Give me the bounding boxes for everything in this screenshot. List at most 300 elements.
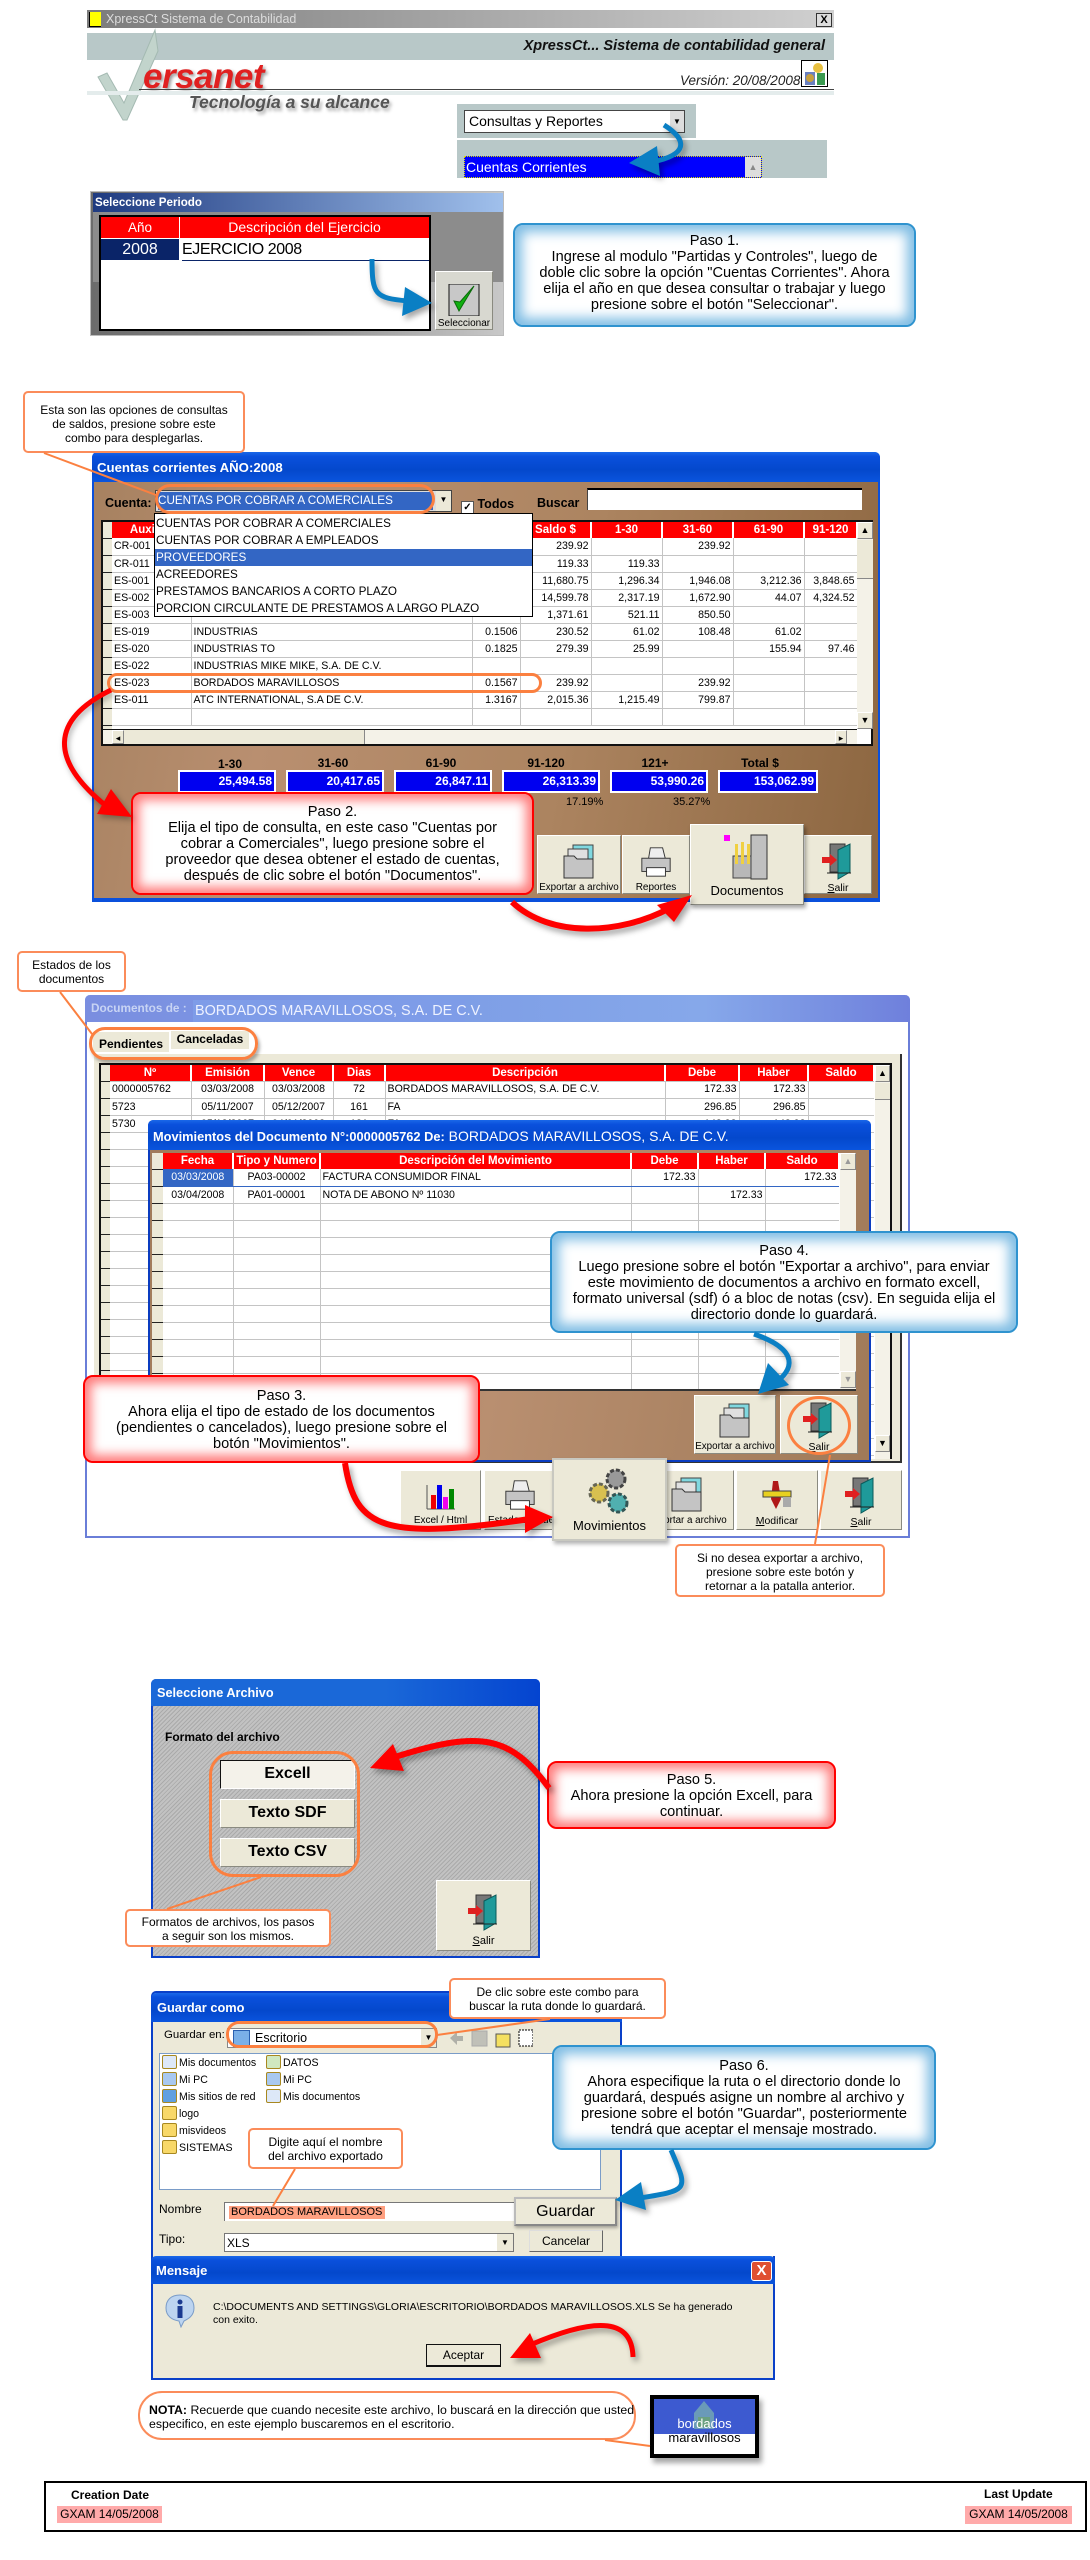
title bar: Seleccione Archivo: [157, 1686, 274, 1700]
Nombre field: Nombre: [159, 2202, 202, 2216]
callout: combo route hint: [449, 1978, 666, 2019]
connector: formats callout: [167, 1877, 261, 1909]
accounts grid: 119.33: [557, 558, 588, 570]
callout: combo hint: combo para desplegarlas.: [65, 431, 203, 445]
bottom toolbar buttons: Salir: [850, 1516, 872, 1528]
dropdown list of account types: PORCION CIRCULANTE DE PRESTAMOS A LARGO PLAZO: [156, 602, 479, 615]
accounts grid: 239.92: [556, 676, 588, 688]
panel: Cuentas corrientes window: 17.19%: [566, 796, 603, 808]
callout: Paso 2: cobrar a Comerciales", luego presione sobre el: [181, 836, 484, 852]
title bar: Cuentas corrientes AÑO:2008: [97, 460, 283, 475]
arrow: combo to list: [629, 125, 681, 176]
accounts grid: ES-002: [114, 592, 149, 604]
documents grid: 5723: [112, 1100, 136, 1112]
accounts grid: 0.1825: [485, 642, 518, 654]
toolbar icons: [450, 2030, 533, 2048]
panel: Cuentas corrientes window: 153,062.99: [754, 774, 814, 788]
dropdown list of account types: PROVEEDORES: [156, 551, 246, 564]
panel: Cuentas corrientes window: Salir: [827, 882, 849, 894]
note callout: [138, 2391, 636, 2440]
title bar: Movimientos del Documento N°:0000005762 De: BORDADOS MARAVILLOSOS, S.A. DE C.V.: [153, 1128, 729, 1144]
documents grid: 72: [353, 1083, 365, 1095]
accounts grid: 14,599.78: [541, 592, 588, 604]
title bar: [148, 1120, 871, 1150]
icon: bordados maravillosos file: maravillosos: [668, 2430, 741, 2445]
panel: Documentos window: [85, 995, 910, 1538]
callout: Paso 4: Luego presione sobre el botón "Exportar a archivo", para enviar: [578, 1259, 990, 1275]
documents grid: 03/03/2008: [272, 1083, 325, 1095]
panel: Guardar como window: XLS: [227, 2236, 250, 2250]
button: Aceptar: Aceptar: [443, 2348, 484, 2362]
title bar: [151, 1993, 622, 2022]
vertical scrollbar: [857, 522, 873, 729]
accounts grid: Auxiliar: [130, 524, 172, 536]
bottom toolbar buttons: Exportar a archivo: [647, 1515, 727, 1526]
title: [93, 193, 503, 212]
movements grid: Tipo y Numero: [236, 1155, 317, 1167]
list panel: Cuentas Corrientes: [466, 159, 587, 175]
title bar: [151, 1679, 540, 1706]
accounts grid: INDUSTRIAS: [194, 626, 258, 638]
callout: Salir hint: retornar a la patalla anterior.: [705, 1579, 855, 1593]
panel: Movimientos window: [148, 1120, 871, 1462]
button: Salir: [780, 1395, 858, 1454]
panel: Cuentas corrientes window: 91-120: [527, 756, 565, 770]
documents grid: Vence: [282, 1067, 315, 1079]
buttons row: [537, 824, 872, 910]
icon: information: [166, 2294, 194, 2328]
highlight ring: tabs: [89, 1027, 258, 1060]
scrollbar: ▲: [844, 1156, 852, 1166]
documents grid: 05/12/2007: [201, 1118, 254, 1130]
Guardar en label: Guardar en:: [164, 2029, 225, 2041]
file list: Mis sitios de red: [179, 2091, 256, 2103]
tabs: Canceladas: [177, 1032, 243, 1046]
icon: bordados maravillosos file: [650, 2395, 759, 2458]
documents grid: Dias: [347, 1067, 371, 1079]
scrollbar: [840, 1153, 856, 1391]
callout: formats hint: Formatos de archivos, los pasos: [142, 1915, 314, 1929]
accounts grid: ES-020: [114, 642, 149, 654]
title bar: [92, 452, 880, 482]
documents grid: 5730: [112, 1118, 136, 1130]
button: Texto CSV: Texto CSV: [248, 1843, 327, 1860]
checkbox Todos: ✓: [463, 502, 472, 513]
accounts grid: 97.46: [828, 642, 854, 654]
accounts grid: [101, 520, 873, 746]
file list: SISTEMAS: [179, 2142, 233, 2154]
accounts grid: 61-90: [754, 524, 783, 536]
combo panel: Consultas y Reportes: [469, 113, 603, 129]
close button: [751, 2261, 772, 2281]
movements grid: Descripción del Movimiento: [399, 1155, 552, 1167]
movements grid: PA03-00002: [247, 1171, 306, 1183]
button: Salir: [436, 1880, 531, 1951]
accounts grid: CR-011: [114, 558, 150, 570]
panel: Cuentas corrientes window: 53,990.26: [651, 774, 704, 788]
file list: Mis documentos: [283, 2091, 360, 2103]
button: Exportar a archivo: Exportar a archivo: [695, 1441, 775, 1452]
callout: Paso 3: Ahora elija el tipo de estado de los documentos: [128, 1404, 435, 1420]
connector: combo callout: [44, 453, 156, 495]
highlight ring: folder combo: [226, 2021, 438, 2048]
highlight ring: account combo: [155, 484, 435, 514]
accounts grid: 1-30: [615, 524, 638, 536]
documents grid: FA: [388, 1118, 400, 1130]
combo panel: ▼: [673, 117, 681, 126]
title: Seleccione Periodo: [95, 196, 202, 209]
panel: Guardar como window: BORDADOS MARAVILLOSOS: [231, 2206, 382, 2218]
callout: Paso 2: Elija el tipo de consulta, en este caso "Cuentas por: [168, 820, 497, 836]
accounts grid: ATC INTERNATIONAL, S.A DE C.V.: [194, 694, 363, 706]
button: Movimientos: [552, 1458, 667, 1541]
documents grid: Haber: [757, 1067, 790, 1079]
accounts grid: INDUSTRIAS MIKE MIKE, S.A. DE C.V.: [194, 660, 381, 672]
footer box: [44, 2481, 1087, 2532]
movements grid: Haber: [715, 1155, 748, 1167]
creation date value: GXAM 14/05/2008: [60, 2507, 159, 2521]
movements grid: 03/03/2008: [171, 1171, 224, 1183]
dropdown list of account types: CUENTAS POR COBRAR A COMERCIALES: [156, 517, 391, 530]
arrow: Paso 6 to Guardar: [615, 2150, 682, 2210]
documents grid: 05/11/2007: [201, 1100, 254, 1112]
movements grid: 172.33: [730, 1188, 762, 1200]
button: Movimientos: Movimientos: [573, 1518, 646, 1533]
callout: Paso 5: continuar.: [660, 1804, 723, 1820]
callout: Paso 3: (pendientes o cancelados), luego presione sobre el: [116, 1420, 447, 1436]
accounts grid: 799.87: [698, 694, 730, 706]
callout: Paso 4: este movimiento de documentos a archivo en formato excell,: [588, 1275, 980, 1291]
title bar: Documentos de :: [91, 1001, 187, 1015]
button: Guardar: [514, 2197, 617, 2226]
list panel: ▲: [749, 162, 757, 172]
documents grid: 296.85: [704, 1100, 736, 1112]
folder combo: Escritorio: [255, 2031, 307, 2045]
button: Aceptar: [426, 2344, 501, 2367]
callout: Paso 2: Paso 2.: [308, 804, 357, 820]
title bar: [87, 10, 834, 28]
button: Salir: Salir: [808, 1441, 830, 1453]
callout: combo hint: [23, 391, 245, 453]
callout: Paso 6: [552, 2045, 936, 2150]
last update label: Last Update: [984, 2487, 1053, 2501]
callout: Paso 1: presione sobre el botón "Seleccionar".: [591, 297, 838, 313]
horizontal scrollbar: ◂: [116, 733, 120, 743]
file list: Mi PC: [179, 2074, 208, 2086]
accounts grid: 239.92: [556, 540, 588, 552]
callout: Paso 2: después de clic sobre el botón "Documentos".: [184, 868, 481, 884]
account combo: CUENTAS POR COBRAR A COMERCIALES: [158, 494, 393, 507]
button: Texto SDF: Texto SDF: [249, 1804, 326, 1821]
panel: Cuentas corrientes window: Documentos: [710, 883, 783, 898]
panel: Guardar como window: [151, 1991, 622, 2256]
banner strip: [87, 33, 834, 60]
scrollbar: ▲: [878, 1068, 887, 1078]
panel: Cuentas corrientes window: 121+: [641, 756, 669, 770]
highlight ring: format buttons: [209, 1751, 360, 1877]
tabs: [93, 1031, 249, 1052]
title bar: [85, 995, 910, 1022]
account combo: [155, 490, 452, 512]
callout: Paso 1: Paso 1.: [690, 233, 739, 249]
file list: logo: [179, 2108, 199, 2120]
panel: Cuentas corrientes window: Exportar a archivo: [539, 882, 619, 893]
bottom toolbar buttons: Excel / Html: [414, 1515, 467, 1526]
callout: Paso 6: Ahora especifique la ruta o el directorio donde lo: [587, 2074, 901, 2090]
bottom toolbar buttons: [401, 1458, 902, 1546]
totals labels and values: [178, 756, 818, 808]
icon: bordados maravillosos file: bordados: [677, 2416, 732, 2431]
last update value: GXAM 14/05/2008: [969, 2507, 1068, 2521]
accounts grid: 521.11: [628, 608, 660, 620]
callout: Paso 6: tendrá que aceptar el mensaje mostrado.: [611, 2122, 877, 2138]
callout: Paso 4: Paso 4.: [759, 1243, 809, 1259]
accounts grid: 0.1506: [485, 626, 518, 638]
callout: combo hint: Esta son las opciones de consultas: [40, 403, 228, 417]
accounts grid: 1,296.34: [618, 574, 660, 586]
panel: application window XpressCt: [87, 10, 834, 178]
connector: note callout: [605, 2440, 650, 2446]
title bar: Mensaje: [156, 2263, 207, 2278]
accounts grid: 1,672.90: [689, 592, 730, 604]
file list: DATOS: [283, 2057, 319, 2069]
accounts grid: 91-120: [813, 524, 848, 536]
documents grid: 05/12/2007: [272, 1100, 325, 1112]
callout: document states: Estados de los: [32, 958, 111, 972]
dropdown list of account types: [154, 513, 533, 617]
title bar: BORDADOS MARAVILLOSOS, S.A. DE C.V.: [195, 1003, 483, 1019]
message text: con exito.: [213, 2314, 258, 2326]
horizontal scrollbar: [103, 729, 857, 744]
panel: Cuentas corrientes window: 26,313.39: [543, 774, 596, 788]
arrow: Paso 2 to Documentos: [512, 895, 692, 929]
checkbox Todos: Todos: [477, 497, 514, 511]
callout: Paso 6: guardará, después asigne un nombre al archivo y: [584, 2090, 904, 2106]
panel: Cuentas corrientes window: 26,847.11: [435, 774, 488, 788]
logo check mark: [97, 28, 158, 120]
callout: file name hint: del archivo exportado: [268, 2149, 383, 2163]
documents grid: 131: [350, 1118, 368, 1130]
callout: combo hint: de saldos, presione sobre este: [52, 417, 216, 431]
Seleccionar button: Seleccionar: [438, 318, 490, 329]
horizontal scrollbar: ▸: [839, 733, 843, 743]
title bar: X: [820, 14, 828, 26]
button: Cancelar: [529, 2230, 603, 2252]
note callout: NOTA: Recuerde que cuando necesite este archivo, lo buscará en la dirección que usted: [149, 2403, 634, 2417]
folder combo: ▼: [425, 2033, 432, 2042]
button: Exportar a archivo: [694, 1395, 776, 1454]
panel: Cuentas corrientes window: Reportes: [636, 882, 676, 893]
documents grid: FA: [388, 1100, 400, 1112]
documents grid: Nº: [144, 1067, 156, 1079]
documents grid: Saldo: [825, 1067, 857, 1079]
creation date label: Creation Date: [71, 2488, 149, 2502]
accounts grid: Saldo $: [535, 524, 576, 536]
panel: Guardar como window: ▼: [501, 2238, 509, 2247]
arrow: Paso 4 to export button: [754, 1334, 789, 1394]
documents grid: BORDADOS MARAVILLOSOS, S.A. DE C.V.: [388, 1083, 599, 1095]
panel: Seleccione Periodo window: [90, 191, 504, 336]
banner strip: XpressCt... Sistema de contabilidad general: [524, 38, 825, 54]
panel: Cuentas corrientes window: 31-60: [318, 756, 348, 770]
panel: Seleccione Archivo window: [151, 1679, 540, 1958]
panel: Cuentas corrientes window: [92, 452, 880, 902]
vertical scrollbar: ▼: [861, 715, 869, 725]
documents grid: 148.93: [773, 1118, 806, 1130]
documents grid: 04/01/2008: [272, 1118, 325, 1130]
movements grid: PA01-00001: [247, 1188, 306, 1200]
file list: [159, 2053, 601, 2190]
dropdown list of account types: CUENTAS POR COBRAR A EMPLEADOS: [156, 534, 379, 547]
accounts grid: 4,324.52: [813, 592, 854, 604]
accounts grid: 3,848.65: [813, 574, 854, 586]
documents grid: 172.33: [773, 1083, 806, 1095]
button: Texto SDF: [220, 1799, 355, 1828]
callout: Paso 5: [547, 1761, 836, 1829]
icon: user keys: [801, 60, 828, 87]
accounts grid: 239.92: [698, 540, 730, 552]
documents grid: 161: [350, 1100, 368, 1112]
accounts grid: 1,215.49: [618, 694, 660, 706]
movements grid: Debe: [650, 1155, 679, 1167]
callout: Paso 1: [513, 223, 916, 327]
accounts grid: 61.02: [775, 626, 802, 638]
account combo: ▼: [440, 495, 447, 504]
filter labels: Cuenta:: [105, 496, 152, 510]
movements grid: 172.33: [663, 1171, 696, 1183]
documents grid: 03/03/2008: [201, 1083, 254, 1095]
panel: Cuentas corrientes window: 35.27%: [673, 796, 710, 808]
list panel: [457, 140, 827, 178]
button: Cancelar: Cancelar: [542, 2234, 590, 2248]
panel: Cuentas corrientes window: 61-90: [426, 756, 456, 770]
movements grid: Fecha: [181, 1155, 214, 1167]
callout: Paso 5: Paso 5.: [667, 1772, 716, 1788]
documents grid: 296.85: [773, 1100, 806, 1112]
Seleccionar button: [435, 271, 493, 330]
documents grid: Emisión: [205, 1067, 250, 1079]
accounts grid: 119.33: [628, 558, 660, 570]
button: Guardar: Guardar: [536, 2203, 595, 2220]
callout: formats hint: [125, 1909, 331, 1947]
callout: Salir hint: [675, 1544, 885, 1597]
title bar: Guardar como: [157, 2000, 244, 2015]
accounts grid: 0.1567: [485, 676, 518, 688]
message text: C:\DOCUMENTS AND SETTINGS\GLORIA\ESCRITORIO\BORDADOS MARAVILLOSOS.XLS Se ha generado: [213, 2301, 733, 2313]
scrollbar: ▼: [878, 1438, 887, 1448]
panel: Cuentas corrientes window: Total $: [741, 756, 779, 770]
arrow: to Aceptar: [510, 2325, 633, 2358]
tab body: [94, 1054, 902, 1463]
version: Versión: 20/08/2008: [680, 73, 800, 88]
callout: combo route hint: De clic sobre este combo para: [476, 1985, 639, 1999]
movements grid: Saldo: [786, 1155, 818, 1167]
accounts grid: 1.3167: [485, 694, 518, 706]
callout: file name hint: [248, 2128, 403, 2169]
callout: Paso 1: elija el año en que desea consultar o trabajar y luego: [543, 281, 886, 297]
bottom toolbar buttons: Estado de Cuenta: [488, 1515, 568, 1526]
callout: Paso 5: Ahora presione la opción Excell, para: [571, 1788, 812, 1804]
accounts grid: 155.94: [769, 642, 802, 654]
accounts grid: INDUSTRIAS TO: [194, 642, 275, 654]
logo wordmark: ersanet: [143, 57, 264, 96]
year table: Año: [128, 220, 152, 235]
accounts grid: 2,015.36: [547, 694, 588, 706]
search: Buscar: [537, 496, 579, 510]
accounts grid: 1,946.08: [689, 574, 730, 586]
panel: Mensaje dialog: [151, 2256, 775, 2380]
year table: [99, 215, 431, 331]
callout: Paso 6: Paso 6.: [719, 2058, 769, 2074]
documents grid: 172.33: [704, 1083, 736, 1095]
movements grid: 03/04/2008: [171, 1188, 224, 1200]
callout: Salir hint: presione sobre este botón y: [706, 1565, 854, 1579]
file list: misvideos: [179, 2125, 226, 2137]
scrollbar: ▼: [844, 1374, 852, 1384]
vertical scrollbar: ▲: [861, 525, 869, 535]
Tipo field: Tipo:: [159, 2232, 185, 2246]
accounts grid: CR-001: [114, 540, 151, 552]
movements grid: 172.33: [804, 1171, 836, 1183]
accounts grid: BORDADOS MARAVILLOSOS: [194, 676, 339, 688]
title bar: [151, 2256, 775, 2284]
divider line: [139, 89, 834, 90]
highlight ring: provider row: [107, 673, 542, 693]
callout: document states: documentos: [39, 972, 104, 986]
callout: document states: [17, 951, 126, 992]
callout: Paso 4: formato universal (sdf) ó a bloc de notas (csv). En seguida elija el: [573, 1291, 995, 1307]
callout: Paso 6: presione sobre el botón "Guardar", posteriormente: [581, 2106, 907, 2122]
year table: EJERCICIO 2008: [182, 241, 302, 258]
arrow: provider to Paso 2: [64, 690, 132, 817]
connector: salir callout: [815, 1455, 830, 1544]
button: Excell: [220, 1760, 355, 1789]
panel: Cuentas corrientes window: 1-30: [218, 757, 242, 771]
callout: Paso 3: botón "Movimientos".: [213, 1436, 350, 1452]
accounts grid: ES-003: [114, 608, 149, 620]
arrow: Paso 3 to Movimientos: [345, 1463, 553, 1533]
accounts grid: 2,317.19: [618, 592, 660, 604]
accounts grid: 108.48: [698, 626, 730, 638]
title bar: XpressCt Sistema de Contabilidad: [106, 12, 296, 26]
folder combo: [227, 2028, 437, 2048]
connector: file name callout: [273, 2169, 295, 2206]
callout: combo route hint: buscar la ruta donde lo guardará.: [469, 1999, 646, 2013]
scrollbar: [875, 1065, 890, 1459]
format label: Formato del archivo: [165, 1730, 280, 1744]
callout: Paso 1: doble clic sobre la opción "Cuentas Corrientes". Ahora: [539, 265, 890, 281]
checkbox Todos: [461, 497, 514, 513]
documents grid: [99, 1063, 892, 1459]
bottom toolbar buttons: Modificar: [756, 1515, 798, 1527]
message text: [213, 2301, 733, 2326]
panel: Cuentas corrientes window: 20,417.65: [327, 774, 380, 788]
movements grid: [152, 1153, 856, 1391]
slogan: Tecnología a su alcance: [189, 92, 390, 112]
callout: Paso 4: directorio donde lo guardará.: [691, 1307, 877, 1323]
button: Texto CSV: [220, 1838, 355, 1867]
dropdown list of account types: PRESTAMOS BANCARIOS A CORTO PLAZO: [156, 585, 397, 598]
accounts grid: 230.52: [556, 626, 588, 638]
accounts grid: ES-011: [114, 694, 149, 706]
button: Salir: Salir: [472, 1935, 494, 1947]
accounts grid: 31-60: [683, 524, 712, 536]
highlight ring: Salir: [787, 1396, 851, 1455]
callout: file name hint: Digite aquí el nombre: [268, 2135, 383, 2149]
panel: Cuentas corrientes window: 25,494.58: [219, 774, 272, 788]
accounts grid: 279.39: [556, 642, 588, 654]
callout: Paso 1: Ingrese al modulo "Partidas y Controles", luego de: [552, 249, 877, 265]
